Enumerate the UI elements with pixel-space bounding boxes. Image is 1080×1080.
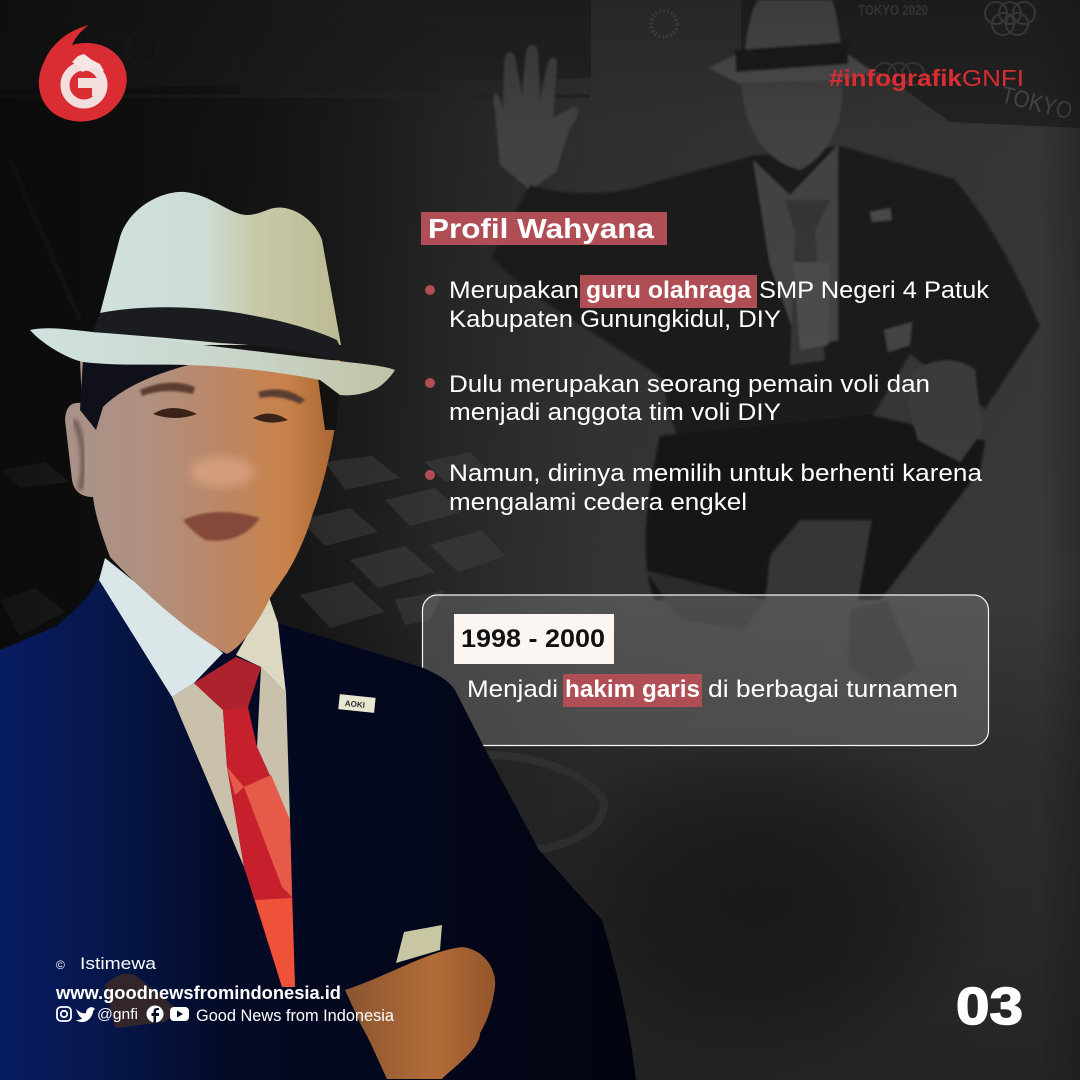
head, neck and face [65,360,340,654]
lapel badges [870,208,892,222]
ear shadow [74,420,83,490]
knee hand [908,360,982,462]
icon: twitter [76,1007,95,1022]
bullet 2 [425,371,930,426]
social icons row [57,1006,395,1025]
bullet 2: menjadi anggota tim voli DIY [449,399,781,426]
bullet 3: mengalami cedera engkel [449,489,747,516]
nose [190,456,254,488]
photo credit: Istimewa [80,954,157,973]
sleeve and jacket [491,146,1040,440]
olympic rings right [985,2,1035,35]
social icons row: Good News from Indonesia [196,1006,395,1025]
year label [454,614,614,664]
bullet 1: SMP Negeri 4 Patuk [759,277,990,304]
shirt left [172,683,244,867]
card text: hakim garis [565,676,700,703]
bullet 1: Kabupaten Gunungkidul, DIY [449,306,781,333]
card text: di berbagai turnamen [708,676,958,703]
hair [80,360,200,430]
bullet 1 [425,275,990,333]
social icons row: @gnfi [97,1006,138,1023]
eyebrows and eyes [140,383,305,423]
lapel pin [338,694,376,713]
bullet 2: Dulu merupakan seorang pemain voli dan [449,371,930,398]
year label: 1998 - 2000 [461,625,605,653]
card text [467,674,958,707]
photo credit [56,954,157,973]
timeline card [422,595,988,746]
forearm hand [345,947,495,1079]
lower floor shadow [520,725,1000,1075]
olympic logo ring on banner [651,11,677,37]
highlight: guru olahraga: guru olahraga [586,277,752,304]
background figure: seated referee silhouette [491,0,1040,690]
pocket badge [396,925,442,963]
olympic rings left [101,32,158,64]
hat crown [97,192,341,345]
photo credit: © [56,958,65,972]
shirt right [257,667,290,820]
background: darkened court photo: TOKYO 2020 [858,2,928,19]
hat brim [30,328,395,395]
hat band [93,307,347,362]
neck and face [742,80,842,170]
shirt [753,145,838,350]
hat [708,0,874,84]
court markings and checker pattern [0,452,505,636]
profile heading: Profil Wahyana [428,213,654,244]
suit jacket [0,578,636,1080]
lapel pin: AOKI [344,699,365,710]
trousers [646,415,985,600]
dark upper stand band [0,0,1080,128]
main portrait: man in hat and navy suit [0,192,636,1080]
bullet 3 [425,460,983,516]
mouth [183,512,260,541]
shoes [848,600,916,690]
logo GNFI [39,25,127,122]
hashtag: #infografik GNFI [829,65,1024,91]
bullet 3: Namun, dirinya memilih untuk berhenti karena [449,460,983,487]
tie [785,200,830,365]
card text: Menjadi [467,676,558,703]
icon: instagram [57,1007,71,1021]
left hand under text [105,974,178,1028]
icon: youtube [170,1007,189,1021]
banner rectangles [240,20,440,95]
icon: facebook [146,1006,164,1023]
bullet 1: Merupakan [449,277,579,304]
website: www.goodnewsfromindonesia.id [55,983,341,1003]
collar left [99,558,223,697]
raised hand [493,45,578,190]
page number: 03 [956,978,1023,1036]
collar right [236,597,286,693]
red tie [194,657,295,987]
